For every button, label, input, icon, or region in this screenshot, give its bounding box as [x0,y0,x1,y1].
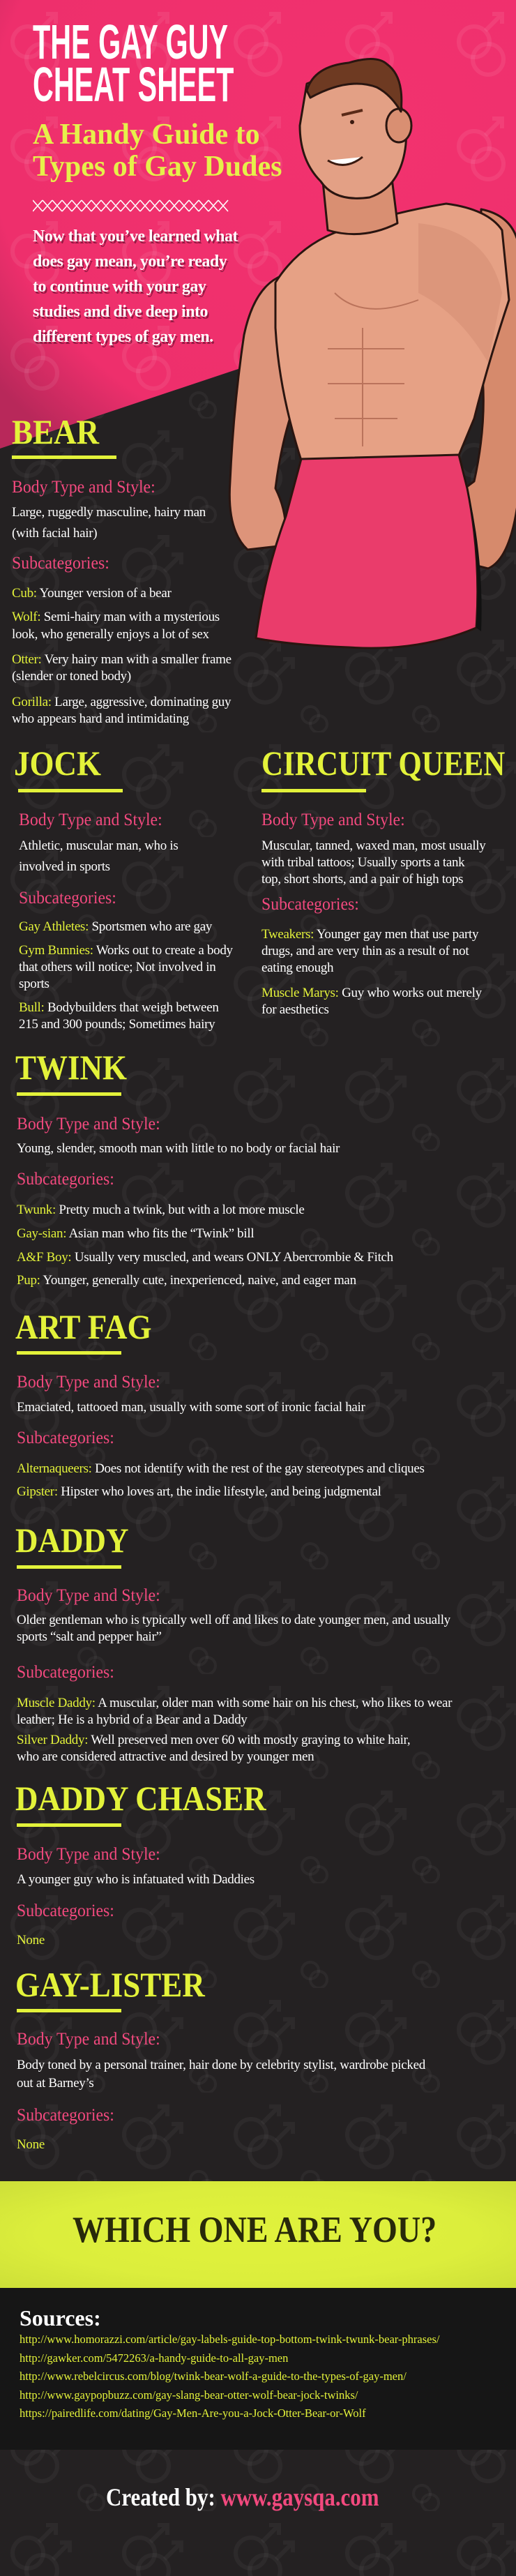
body type: Body Type and Style: [17,2030,160,2049]
panel: daddy: leather; He is a hybrid of a Bear and a Daddy [17,1712,247,1727]
callout banner: which one are you: WHICH ONE ARE YOU? [73,2210,437,2250]
panel: circuit queen: Muscular, tanned, waxed man, most usually [261,838,485,853]
panel: daddy: Muscle Daddy: A muscular, older man with some hair on his chest, who likes to wear [17,1696,452,1710]
subcategories label: Subcategories: [12,554,109,573]
body type text: Large, ruggedly masculine, hairy man [12,505,206,520]
panel: circuit queen [261,744,505,1017]
panel: daddy [15,1521,452,1764]
body type label: Body Type and Style: [12,478,155,497]
panel: daddy: who are considered attractive and desired by younger men [17,1749,314,1764]
panel: art fag: Emaciated, tattooed man, usually with some sort of ironic facial hair [17,1400,365,1415]
panel: bear: who appears hard and intimidating [12,711,189,726]
panel: circuit queen: eating enough [261,961,333,975]
panel: jock: involved in sports [19,859,110,874]
body type: Body Type and Style: [19,811,162,829]
panel: twink: Pup: Younger, generally cute, inexperienced, naive, and eager man [17,1273,356,1288]
panel: art fag: Gipster: Hipster who loves art, the indie lifestyle, and being judgmental [17,1484,381,1499]
subcategories: Subcategories: [17,1901,114,1920]
body type: Body Type and Style: [261,811,405,829]
panel: bear: look, who generally enjoys a lot of sex [12,627,209,642]
illustration: man in pink shorts [229,58,516,649]
body type: Body Type and Style: [17,1373,160,1392]
panel: bear: Otter: Very hairy man with a smaller frame [12,652,232,667]
panel: art fag: Alternaqueers: Does not identify with the rest of the gay stereotypes and cliques [17,1461,425,1476]
intro paragraph: different types of gay men. [33,328,213,346]
sources list [20,2333,439,2420]
panel: circuit queen: Muscle Marys: Guy who works out merely [261,986,482,1000]
title [33,15,234,112]
panel: twink: Twunk: Pretty much a twink, but with a lot more muscle [17,1203,305,1217]
panel: twink: Young, slender, smooth man with little to no body or facial hair [17,1141,340,1156]
panel: circuit queen: for aesthetics [261,1002,329,1017]
sources heading: Sources: [20,2305,101,2330]
panel: gay-lister: None [17,2137,45,2152]
decorative cross stitch divider [33,199,229,212]
subcategories: Subcategories: [17,1170,114,1189]
intro paragraph: does gay mean, you’re ready [33,253,227,271]
subcategories: Subcategories: [19,889,116,907]
panel: bear: (slender or toned body) [12,669,131,684]
panel: gay-lister: Body toned by a personal trainer, hair done by celebrity stylist, wardrobe picked [17,2058,425,2072]
panel: twink [15,1048,393,1288]
intro paragraph: to continue with your gay [33,278,206,296]
panel: sources [0,2288,516,2450]
heading: circuit queen: CIRCUIT QUEEN [261,744,505,783]
panel: daddy chaser: None [17,1933,45,1948]
panel: circuit queen: with tribal tattoos; Usually sports a tank [261,855,464,870]
sources list: http://www.gaypopbuzz.com/gay-slang-bear-otter-wolf-bear-jock-twinks/ [20,2388,358,2401]
panel: jock: Athletic, muscular man, who is [19,838,178,853]
panel: jock: Bull: Bodybuilders that weigh between [19,1000,219,1015]
sources list: http://www.rebelcircus.com/blog/twink-bear-wolf-a-guide-to-the-types-of-gay-men/ [20,2370,407,2383]
panel: circuit queen: drugs, and are very thin as a result of not [261,944,469,958]
body type text: (with facial hair) [12,526,97,541]
title: CHEAT SHEET [33,57,234,112]
sources list: https://pairedlife.com/dating/Gay-Men-Are-you-a-Jock-Otter-Bear-or-Wolf [20,2406,366,2420]
panel: jock: 215 and 300 pounds; Sometimes hairy [19,1017,215,1032]
sources list: http://www.homorazzi.com/article/gay-labels-guide-top-bottom-twink-twunk-bear-phrases/ [20,2333,439,2346]
body type: Body Type and Style: [17,1115,160,1133]
subcategories: Subcategories: [17,1663,114,1682]
heading: jock: JOCK [14,744,101,783]
panel: gay-lister: out at Barney’s [17,2076,94,2091]
heading: daddy chaser: DADDY CHASER [15,1779,266,1818]
heading: daddy: DADDY [15,1521,128,1560]
subtitle: Types of Gay Dudes [33,151,282,183]
body type: Body Type and Style: [17,1845,160,1864]
panel: jock: Gym Bunnies: Works out to create a body [19,943,233,958]
subcategories: Subcategories: [17,2106,114,2125]
panel: bear: Gorilla: Large, aggressive, dominating guy [12,695,231,709]
heading: bear: BEAR [12,412,99,451]
footer credit: Created by: www.gaysqa.com [106,2483,379,2511]
subcategory list: Cub: Younger version of a bear [12,586,171,601]
subcategories: Subcategories: [261,895,359,914]
body type: Body Type and Style: [17,1586,160,1605]
sources list: http://gawker.com/5472263/a-handy-guide-to-all-gay-men [20,2351,288,2365]
callout banner: which one are you [0,2181,516,2288]
panel: art fag [15,1307,425,1499]
panel: circuit queen: top, short shorts, and a pair of high tops [261,872,463,887]
panel: daddy: Silver Daddy: Well preserved men over 60 with mostly graying to white hair, [17,1733,410,1747]
panel: bear [12,412,232,726]
heading: twink: TWINK [15,1048,127,1087]
panel: jock: sports [19,977,50,991]
panel: circuit queen: Tweakers: Younger gay men that use party [261,927,478,942]
panel: jock: Gay Athletes: Sportsmen who are gay [19,919,212,934]
panel: daddy chaser [15,1779,266,1948]
body type text [12,505,206,541]
heading: art fag: ART FAG [15,1307,152,1346]
subtitle [33,119,282,183]
panel: daddy: sports “salt and pepper hair” [17,1629,162,1644]
intro paragraph [33,227,240,347]
panel: bear: Wolf: Semi-hairy man with a mysterious [12,610,220,624]
panel: twink: A&F Boy: Usually very muscled, and wears ONLY Abercrombie & Fitch [17,1250,393,1265]
panel: daddy chaser: A younger guy who is infatuated with Daddies [17,1872,255,1887]
panel: twink: Gay-sian: Asian man who fits the “Twink” bill [17,1226,254,1241]
subtitle: A Handy Guide to [33,119,260,151]
title: THE GAY GUY [33,15,228,69]
intro paragraph: studies and dive deep into [33,303,208,321]
pink header background [0,0,516,449]
panel: daddy: Older gentleman who is typically well off and likes to date younger men, and usually [17,1613,450,1627]
panel: jock [14,744,233,1032]
panel: jock: that others will notice; Not involved in [19,960,215,974]
heading: gay-lister: GAY-LISTER [15,1965,205,2004]
panel: gay-lister [15,1965,425,2152]
subcategories: Subcategories: [17,1429,114,1447]
intro paragraph: Now that you’ve learned what [33,227,238,246]
